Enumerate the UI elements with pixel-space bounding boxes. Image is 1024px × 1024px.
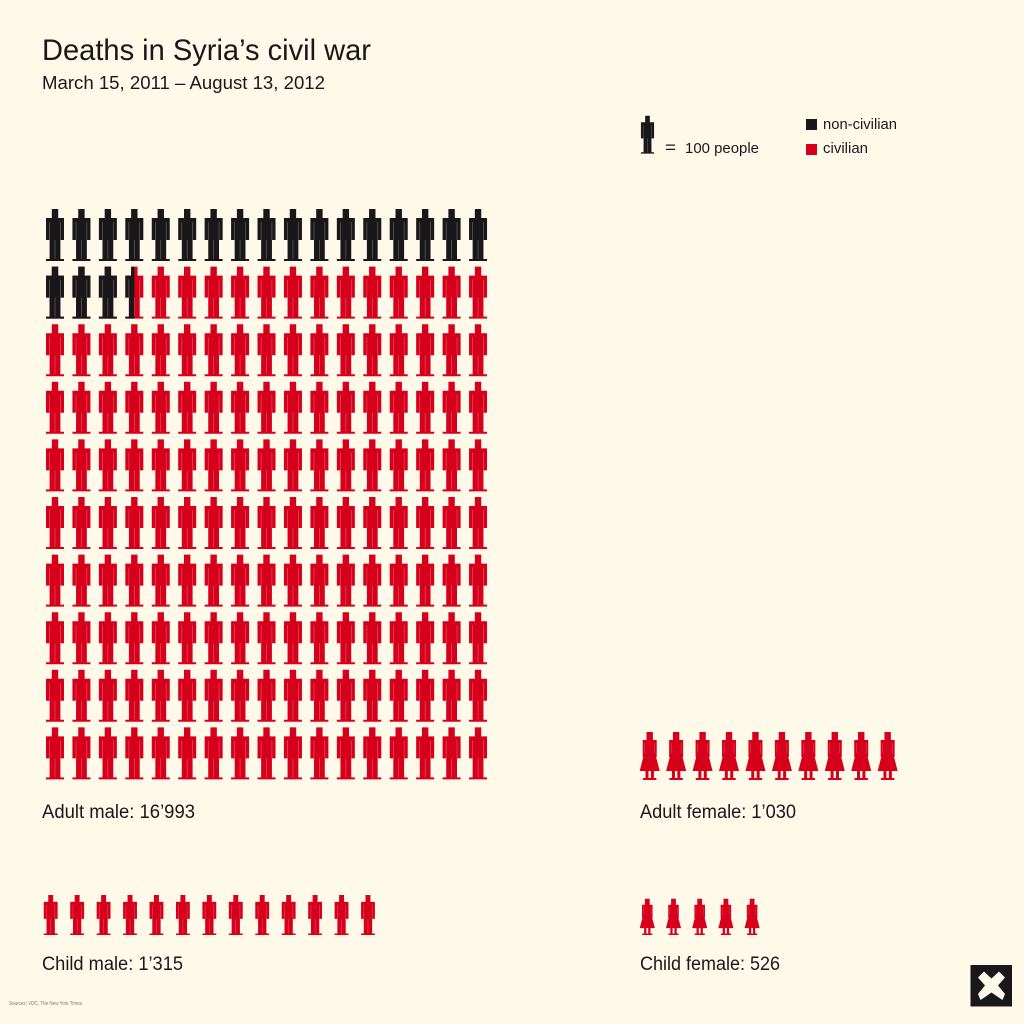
legend swatch: non-civilian <box>806 119 817 130</box>
row 1: non-civilian <box>46 209 487 261</box>
source note: Sources: VDC, The New York Times <box>9 1001 82 1007</box>
pictogram: child male <box>44 895 375 935</box>
title: Deaths in Syria’s civil war <box>42 34 371 67</box>
label: adult female: Adult female: 1’030 <box>640 802 796 823</box>
row 2: mixed <box>46 267 487 319</box>
pictogram: child female <box>640 899 760 935</box>
legend label: civilian: civilian <box>823 140 868 157</box>
legend: 100 people: 100 people <box>685 140 759 157</box>
legend <box>641 116 897 157</box>
legend label: non-civilian: non-civilian <box>823 116 897 133</box>
pictogram: adult female <box>640 732 898 780</box>
rows 3 to 10: civilian <box>46 324 487 779</box>
legend swatch: civilian <box>806 144 817 155</box>
icon: legend figure <box>641 116 654 154</box>
label: adult male: Adult male: 16’993 <box>42 802 195 823</box>
label: child female: Child female: 526 <box>640 954 780 975</box>
pictogram: adult male <box>46 209 487 779</box>
label: child male: Child male: 1’315 <box>42 954 183 975</box>
subtitle: March 15, 2011 – August 13, 2012 <box>42 72 325 93</box>
logo <box>970 965 1012 1006</box>
legend: equals sign: = <box>665 138 676 157</box>
